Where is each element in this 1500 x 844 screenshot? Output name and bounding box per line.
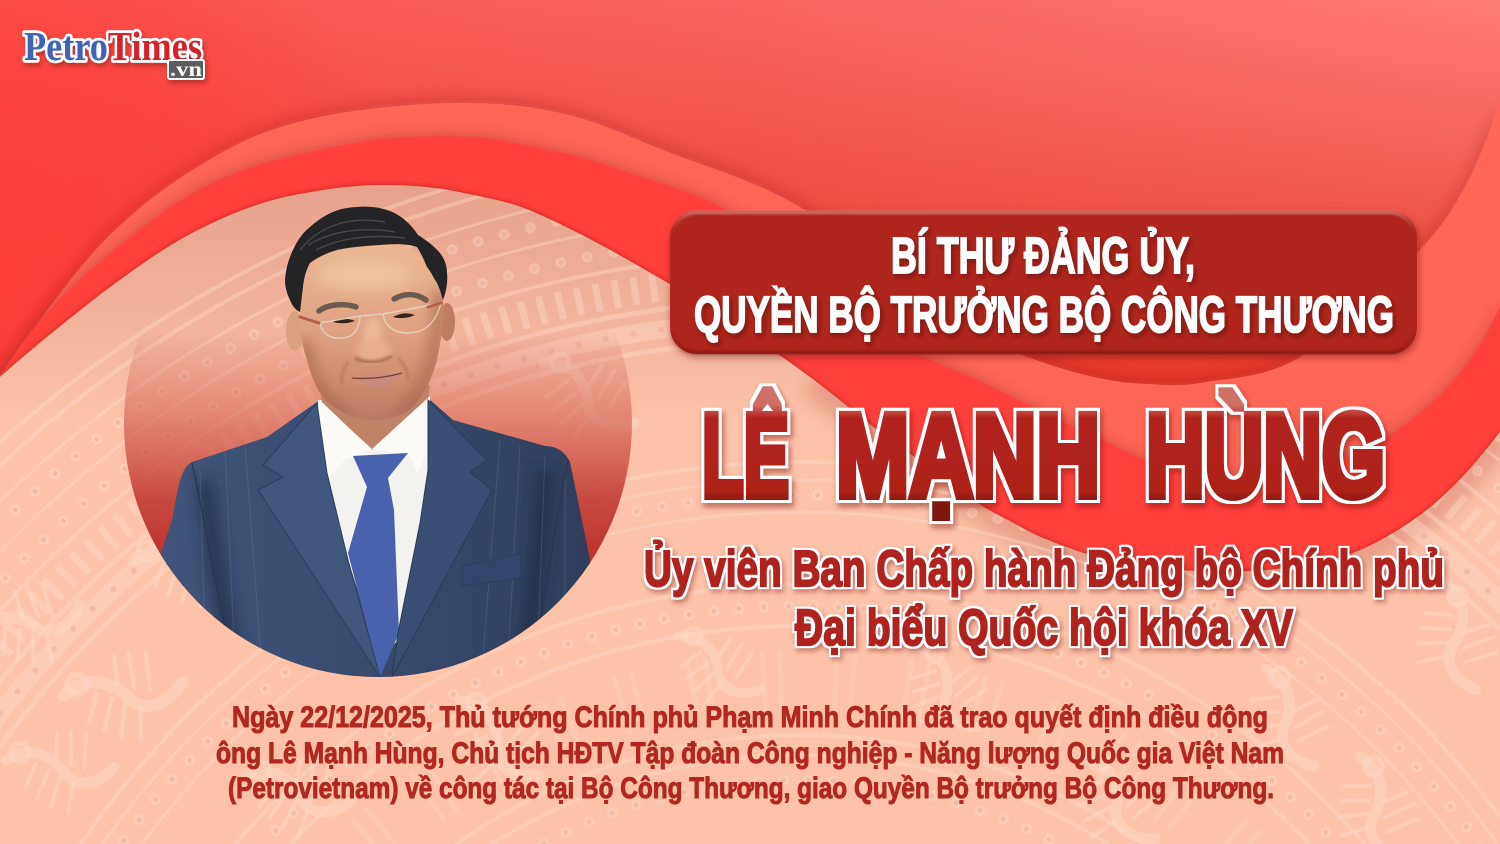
subtitle roles: Đại biểu Quốc hội khóa XV (795, 599, 1293, 656)
suit jacket (160, 398, 600, 680)
title banner (670, 211, 1417, 354)
necktie (348, 453, 408, 677)
shirt (318, 400, 430, 660)
wave: peach lower area with bronze drum pattern (0, 182, 1500, 844)
description paragraph: (Petrovietnam) về công tác tại Bộ Công Thương, giao Quyền Bộ trưởng Bộ Công Thương. (228, 772, 1274, 805)
eyebrows (319, 295, 426, 311)
banner heading text (694, 226, 1394, 343)
logo: PetroTimes.vn: PetroTimes (24, 23, 202, 69)
description paragraph: ông Lê Mạnh Hùng, Chủ tịch HĐTV Tập đoàn Công nghiệp - Năng lượng Quốc gia Việt Nam (216, 737, 1284, 770)
banner heading text: BÍ THƯ ĐẢNG ỦY, (891, 226, 1195, 284)
mouth (354, 374, 401, 386)
neck (320, 385, 430, 450)
description paragraph: Ngày 22/12/2025, Thủ tướng Chính phủ Phạm Minh Chính đã trao quyết định điều động (232, 701, 1268, 734)
right ear (442, 303, 455, 341)
name heading: MẠNH (836, 390, 1100, 522)
face (300, 240, 443, 420)
logo: PetroTimes.vn: .vn (170, 59, 202, 81)
subtitle roles (644, 539, 1444, 656)
right lapel (392, 400, 492, 677)
breast pocket (462, 554, 521, 586)
hair (285, 207, 447, 312)
left lapel (258, 403, 380, 677)
mouth line (352, 373, 402, 378)
collar (317, 396, 430, 478)
portrait circle (124, 169, 632, 680)
left ear (286, 311, 302, 351)
name heading: LÊ (702, 389, 789, 522)
description paragraph (216, 701, 1284, 805)
eyes (333, 313, 415, 323)
name heading (702, 389, 1385, 522)
glasses temples (300, 303, 441, 323)
name heading: HÙNG (1146, 390, 1385, 522)
glasses (320, 303, 441, 338)
